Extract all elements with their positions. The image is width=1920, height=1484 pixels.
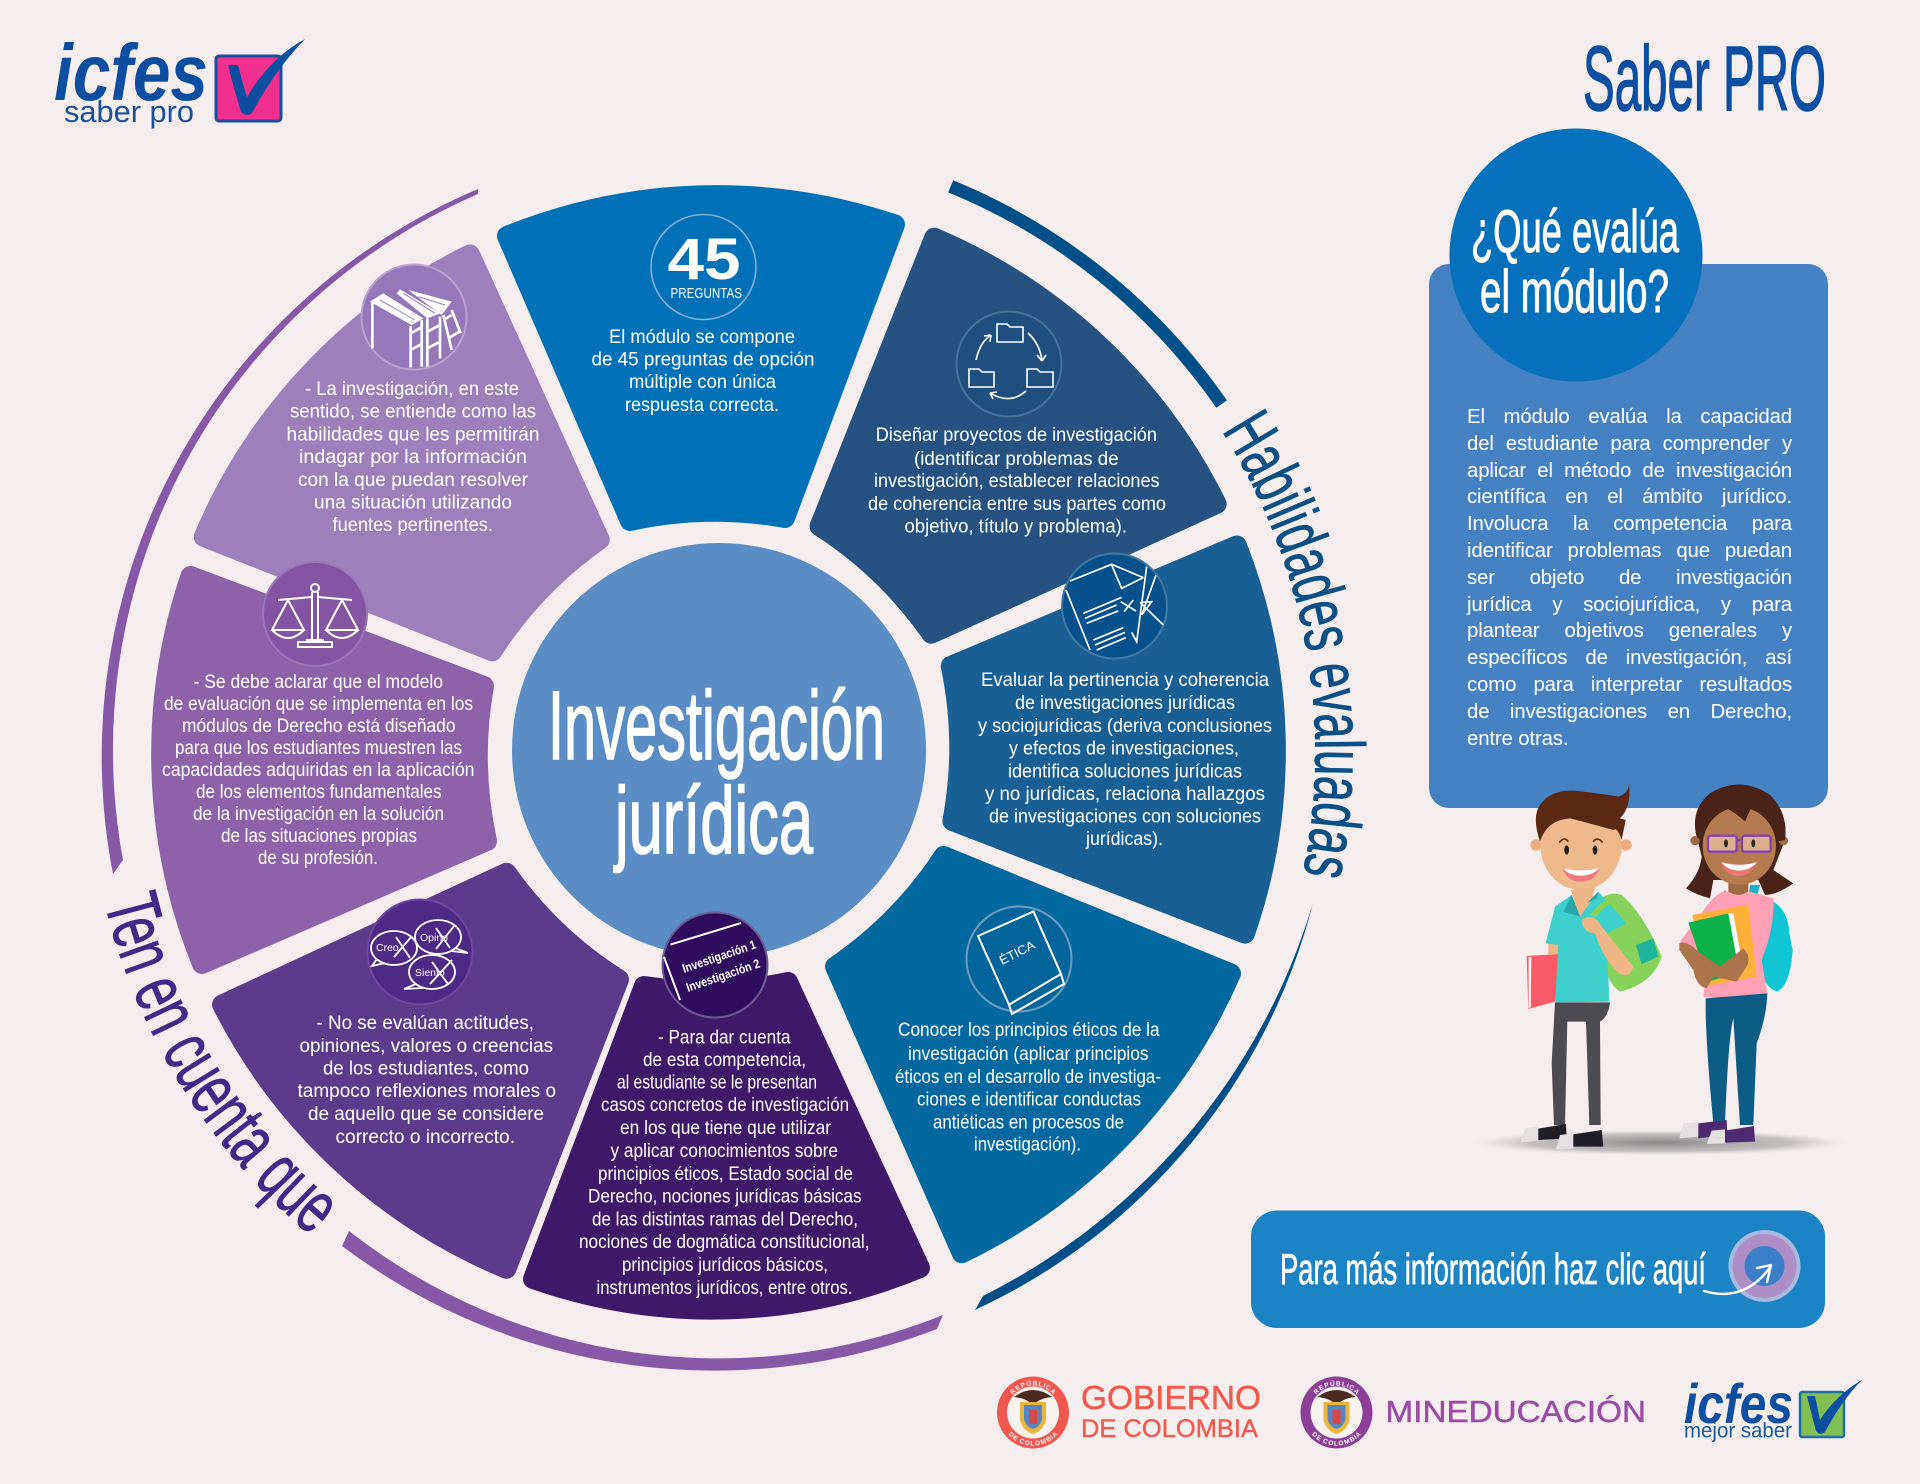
text: conocer los principios description: investigación (aplicar principios — [908, 1043, 1149, 1065]
text: evaluar la pertinencia description: de investigaciones jurídicas — [1015, 692, 1235, 714]
text: para dar cuenta description: al estudiante se le presentan — [617, 1072, 817, 1094]
text: diseñar proyectos description: investigación, establecer relaciones — [874, 470, 1160, 492]
text: se debe aclarar description: para que los estudiantes muestren las — [175, 737, 462, 759]
segment: la investigación — [175, 234, 680, 738]
text: diseñar proyectos description: de coherencia entre sus partes como — [868, 493, 1166, 515]
text: se debe aclarar description: de su profesión. — [258, 847, 378, 869]
text block: módulo evalúa paragraph: jurídica y sociojurídica, y para — [1467, 594, 1792, 616]
text: para dar cuenta description: principios jurídicos básicos, — [622, 1254, 828, 1276]
text: la investigación description: fuentes pertinentes. — [332, 514, 493, 536]
outer arc: ten en cuenta upper — [102, 189, 478, 874]
logo: icfes saber pro: saber pro — [64, 94, 194, 129]
text: evaluar la pertinencia description — [978, 669, 1272, 850]
icon: speech bubbles: Opino — [420, 932, 448, 944]
curved heading: Habilidades evaluadas: Habilidades evaluadas — [1223, 408, 1367, 878]
text: conocer los principios description: Conocer los principios éticos de la — [898, 1019, 1160, 1041]
text: evaluar la pertinencia description: y efectos de investigaciones, — [1009, 738, 1239, 760]
text block: módulo evalúa paragraph: identificar problemas que puedan — [1467, 540, 1792, 562]
text: para dar cuenta description: instrumentos jurídicos, entre otros. — [596, 1277, 852, 1299]
logo: mineducación: DE COLOMBIA — [1312, 1432, 1361, 1446]
text block: módulo evalúa paragraph — [1466, 406, 1792, 750]
text: diseñar proyectos description — [868, 424, 1166, 538]
text: no se evalúan description: - No se evalúan actitudes, — [316, 1012, 534, 1034]
text: evaluar la pertinencia description: jurídicas). — [1085, 828, 1163, 850]
text: 45 preguntas description: respuesta correcta. — [625, 394, 779, 416]
text: diseñar proyectos description: objetivo, título y problema). — [904, 516, 1127, 538]
logo: icfes mejor saber — [1684, 1372, 1862, 1442]
text: conocer los principios description: investigación). — [974, 1134, 1081, 1156]
icon: folders cycle — [956, 312, 1062, 416]
boy — [1521, 784, 1662, 1149]
text: se debe aclarar description: capacidades adquiridas en la aplicación — [162, 759, 474, 781]
text: no se evalúan description: correcto o incorrecto. — [336, 1126, 515, 1148]
text: no se evalúan description: opiniones, valores o creencias — [300, 1035, 553, 1057]
center circle: Investigación jurídica: Investigación — [548, 671, 885, 780]
logo: icfes saber pro — [54, 28, 305, 129]
text: 45 preguntas description: múltiple con única — [629, 371, 776, 393]
text: se debe aclarar description: módulos de Derecho está diseñado — [182, 715, 456, 737]
icon: investigación 1 y 2: Investigación 1 — [680, 938, 758, 976]
outer arc: habilidades evaluadas lower — [975, 903, 1313, 1310]
text: evaluar la pertinencia description: Evaluar la pertinencia y coherencia — [981, 669, 1269, 691]
text: para dar cuenta description: nociones de dogmática constitucional, — [579, 1231, 870, 1253]
icon: 45 preguntas badge — [651, 214, 756, 320]
text: conocer los principios description — [895, 1019, 1161, 1156]
text: para dar cuenta description: en los que tiene que utilizar — [620, 1117, 831, 1139]
heading circle: qué evalúa: ¿Qué evalúa — [1471, 198, 1679, 265]
logo: gobierno de colombia: DE COLOMBIA — [1008, 1432, 1058, 1446]
text: la investigación description: sentido, se entiende como las — [290, 400, 536, 422]
text block: módulo evalúa paragraph: entre otras. — [1467, 728, 1568, 750]
text: diseñar proyectos description: Diseñar proyectos de investigación — [876, 424, 1157, 446]
segment: conocer los principios — [754, 770, 1260, 1274]
text: no se evalúan description: de los estudiantes, como — [323, 1058, 529, 1080]
icon: click target arrow — [1704, 1230, 1800, 1302]
text: no se evalúan description: tampoco reflexiones morales o — [298, 1080, 556, 1102]
center circle: Investigación jurídica — [512, 543, 926, 957]
icon: speech bubbles: Creo — [376, 942, 399, 954]
text block: módulo evalúa paragraph: del estudiante para comprender y — [1467, 433, 1792, 455]
segment: se debe aclarar — [161, 562, 487, 964]
text: se debe aclarar description: de evaluación que se implementa en los — [164, 693, 473, 715]
text: para dar cuenta description: de esta competencia, — [643, 1049, 806, 1071]
icon: documents — [1062, 554, 1167, 658]
outer arc: ten en cuenta lower — [342, 1231, 943, 1371]
text: para dar cuenta description: casos concretos de investigación — [601, 1094, 849, 1116]
text block: módulo evalúa paragraph: plantear objetivos generales y — [1467, 620, 1792, 642]
text: evaluar la pertinencia description: identifica soluciones jurídicas — [1008, 760, 1242, 782]
text block: módulo evalúa paragraph: ser objeto de investigación — [1467, 567, 1792, 589]
segment: diseñar proyectos — [733, 209, 1237, 714]
center circle: Investigación jurídica: jurídica — [613, 768, 813, 874]
text block: módulo evalúa paragraph: como para interpretar resultados — [1467, 674, 1792, 696]
logo: gobierno de colombia: REPÚBLICA — [1010, 1380, 1055, 1394]
segment: evaluar la pertinencia — [948, 543, 1278, 934]
text block: módulo evalúa paragraph: de investigaciones en Derecho, — [1467, 701, 1792, 723]
text: se debe aclarar description: de las situaciones propias — [221, 825, 417, 847]
text: para dar cuenta description: - Para dar cuenta — [658, 1026, 791, 1048]
text: la investigación description: una situación utilizando — [314, 492, 512, 514]
logo: icfes mejor saber: mejor saber — [1684, 1420, 1792, 1442]
text block: módulo evalúa paragraph: Involucra la competencia para — [1467, 513, 1792, 535]
text: se debe aclarar description: de la investigación en la solución — [193, 803, 444, 825]
text: para dar cuenta description: principios éticos, Estado social de — [598, 1163, 853, 1185]
icon: scales of justice — [263, 562, 367, 666]
text: 45 preguntas description: de 45 preguntas de opción — [592, 348, 814, 370]
logo: icfes mejor saber: icfes — [1684, 1372, 1793, 1435]
text: se debe aclarar description — [162, 671, 474, 869]
text: conocer los principios description: ciones e identificar conductas — [917, 1088, 1141, 1110]
heading circle: qué evalúa — [1450, 128, 1702, 382]
logo: gobierno de colombia — [997, 1376, 1261, 1448]
text: conocer los principios description: éticos en el desarrollo de investiga- — [895, 1066, 1161, 1088]
shadow — [1473, 1130, 1847, 1155]
logo: gobierno de colombia: GOBIERNO — [1081, 1379, 1261, 1416]
button: para más información — [1251, 1210, 1825, 1328]
text: se debe aclarar description: - Se debe aclarar que el modelo — [194, 671, 443, 693]
text: 45 preguntas description: El módulo se compone — [609, 326, 795, 348]
text: conocer los principios description: antiéticas en procesos de — [933, 1112, 1124, 1134]
text: para dar cuenta description: Derecho, nociones jurídicas básicas — [588, 1186, 862, 1208]
logo: mineducación: REPÚBLICA — [1313, 1380, 1358, 1394]
girl — [1679, 785, 1793, 1144]
text block: módulo evalúa paragraph: El módulo evalúa la capacidad — [1467, 406, 1792, 428]
segment: para dar cuenta — [533, 912, 920, 1310]
text: no se evalúan description: de aquello que se considere — [308, 1103, 544, 1125]
text: se debe aclarar description: de los elementos fundamentales — [196, 781, 442, 803]
icon: book ética: ÉTICA — [997, 937, 1038, 968]
icon: speech bubbles — [368, 900, 472, 1004]
text block: módulo evalúa paragraph: específicos de investigación, así — [1467, 647, 1792, 669]
text: evaluar la pertinencia description: y no jurídicas, relaciona hallazgos — [985, 783, 1265, 805]
icon: book ética — [966, 906, 1072, 1014]
segment: 45 preguntas — [507, 195, 895, 521]
icon: speech bubbles: Siento — [415, 967, 445, 979]
text: para dar cuenta description — [579, 1026, 870, 1299]
text block: módulo evalúa paragraph: científica en el ámbito jurídico. — [1467, 486, 1792, 508]
icon: investigación 1 y 2: Investigación 2 — [684, 957, 762, 995]
icon: books — [362, 264, 466, 370]
text: la investigación description: indagar por la información — [299, 446, 527, 468]
outer arc: habilidades evaluadas upper — [951, 186, 1222, 404]
icon: 45 preguntas badge: PREGUNTAS — [670, 285, 742, 302]
logo: gobierno de colombia: DE COLOMBIA — [1081, 1415, 1258, 1443]
text: la investigación description: con la que puedan resolver — [298, 469, 528, 491]
text: la investigación description: - La investigación, en este — [305, 378, 519, 400]
curved heading: Ten en cuenta que: Ten en cuenta que — [107, 889, 332, 1232]
text: para dar cuenta description: y aplicar conocimientos sobre — [610, 1140, 838, 1162]
text: la investigación description — [286, 378, 540, 536]
text block: módulo evalúa paragraph: aplicar el método de investigación — [1467, 460, 1792, 482]
icon: 45 preguntas badge: 45 — [668, 227, 740, 292]
illustration: students — [1473, 784, 1847, 1155]
text: evaluar la pertinencia description: de investigaciones con soluciones — [989, 806, 1261, 828]
text: no se evalúan description — [298, 1012, 556, 1148]
text: para dar cuenta description: de las distintas ramas del Derecho, — [592, 1208, 858, 1230]
icon: investigación 1 y 2 — [662, 912, 768, 1018]
logo: icfes saber pro: icfes — [54, 28, 208, 117]
text: evaluar la pertinencia description: y sociojurídicas (deriva conclusiones — [978, 715, 1272, 737]
text: diseñar proyectos description: (identificar problemas de — [914, 448, 1119, 470]
text: 45 preguntas description — [592, 326, 814, 416]
panel: qué evalúa el módulo — [1429, 128, 1828, 808]
heading circle: qué evalúa: el módulo? — [1480, 258, 1669, 325]
segment: no se evalúan — [202, 793, 707, 1298]
logo: mineducación: MINEDUCACIÓN — [1386, 1394, 1646, 1429]
logo: mineducación — [1300, 1376, 1646, 1448]
text: la investigación description: habilidades que les permitirán — [286, 424, 540, 446]
